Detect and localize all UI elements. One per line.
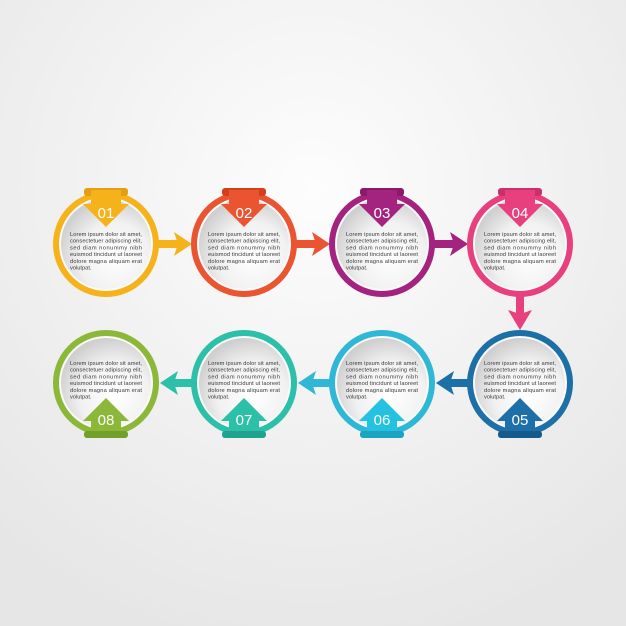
step 01 — [53, 188, 159, 297]
tab 01: 01 — [98, 205, 114, 222]
step 08 — [53, 330, 159, 438]
step 04 — [467, 188, 573, 297]
arrow: 02 to 03 — [294, 232, 330, 256]
arrow: 03 to 04 — [432, 232, 468, 256]
tab 02: 02 — [236, 205, 252, 222]
arrow: 01 to 02 — [156, 232, 192, 256]
step 07 — [191, 330, 297, 438]
step 03 — [329, 188, 435, 297]
arrow: 04 to 05 — [508, 294, 532, 330]
tab 07: 07 — [236, 412, 252, 429]
tab 08: 08 — [98, 412, 114, 429]
arrow: 06 to 07 — [298, 371, 332, 395]
step 05 — [467, 330, 573, 438]
step 02 — [191, 188, 297, 297]
tab 04: 04 — [512, 205, 528, 222]
arrow: 05 to 06 — [436, 371, 470, 395]
tab 06: 06 — [374, 412, 390, 429]
tab 03: 03 — [374, 205, 390, 222]
arrow: 07 to 08 — [160, 371, 194, 395]
tab 05: 05 — [512, 412, 528, 429]
step 06 — [329, 330, 435, 438]
